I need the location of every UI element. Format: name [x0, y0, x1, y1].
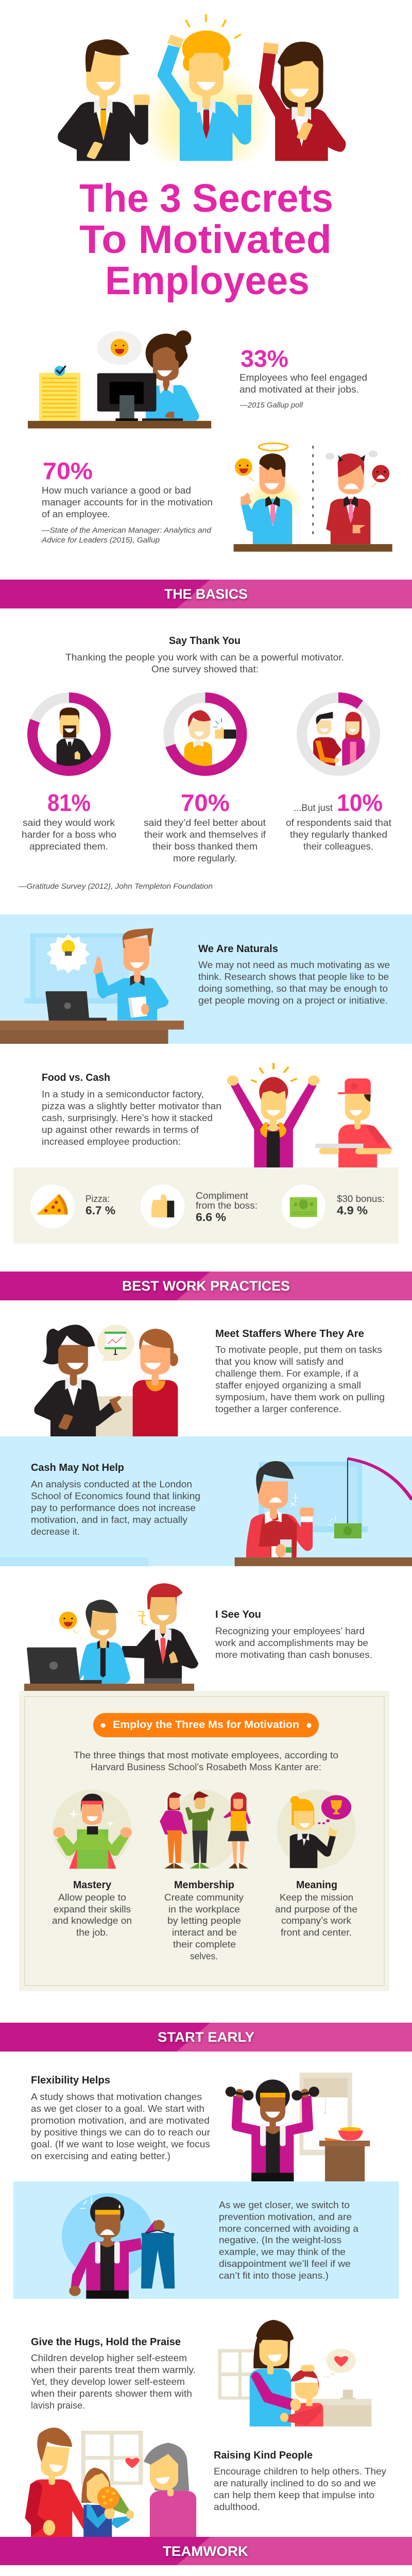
text: bonus: 4.9 % — [337, 1204, 368, 1217]
intro text: The three things that most motivate employees, according to — [74, 1750, 338, 1760]
text: flexibility helps: as we get closer to a goal. We start with — [31, 2104, 204, 2114]
text: say thank you — [65, 635, 344, 674]
section banner: teamwork: TEAMWORK — [163, 2544, 249, 2559]
section banner: best work practices — [0, 1272, 412, 1300]
text: prevention motivation — [219, 2200, 359, 2281]
stat: 33 percent: and motivated at their jobs. — [239, 384, 359, 395]
text: cash may not help: decrease it. — [31, 1527, 80, 1537]
text: meet staffers where they are — [215, 1328, 385, 1414]
text: cash may not help — [31, 1462, 200, 1537]
stat: 70 percent: —State of the American Manager: Analytics and — [41, 527, 212, 535]
illustration: woman exercising with dumbbells — [226, 2073, 370, 2181]
text: flexibility helps — [31, 2075, 210, 2161]
panel: employ the three Ms — [19, 1691, 389, 1991]
text: compliment: 6.6 % — [196, 1211, 226, 1224]
text: survey results: harder for a boss who — [22, 829, 116, 840]
section banner: start early — [0, 2023, 412, 2052]
text: cash may not help: motivation, and in fact, may actually — [31, 1515, 187, 1525]
illustration: mastery — [53, 1790, 132, 1869]
text: i see you: Recognizing your employees’ hard — [215, 1626, 365, 1636]
stat: 70 percent: How much variance a good or bad — [42, 485, 191, 496]
text: pizza — [85, 1194, 115, 1217]
text: prevention motivation: As we get closer, we switch to — [219, 2200, 350, 2210]
icon: cash — [281, 1184, 325, 1228]
text: three Ms columns — [52, 1879, 357, 1961]
text: meet staffers where they are: that you know will satisfy and — [215, 1357, 344, 1367]
stat: 70 percent: manager accounts for in the motivation — [42, 497, 213, 507]
text: prevention motivation: more concerned with avoiding a — [219, 2224, 359, 2234]
text: survey results: their work and themselves if — [144, 829, 266, 840]
text: survey results: ...But just — [294, 803, 333, 813]
title: Employees — [105, 259, 310, 303]
text: prevention motivation: prevention motivation, and are — [219, 2212, 352, 2222]
text: three Ms columns: Membership — [174, 1879, 234, 1891]
text: food vs cash: increased employee production: — [42, 1137, 181, 1147]
text: flexibility helps: Flexibility Helps — [31, 2075, 110, 2086]
illustration: woman worried about fitting in jeans — [62, 2193, 175, 2299]
stat: 70 percent: of an employee. — [42, 509, 110, 519]
illustration: meaning — [277, 1790, 356, 1869]
text: survey results: said they’d feel better about — [144, 818, 266, 828]
text: i see you — [215, 1609, 372, 1660]
text: raising kind people: are naturally inclined to do so and we — [214, 2478, 376, 2488]
text: meet staffers where they are: challenge them. For example, if a — [215, 1368, 359, 1379]
stat: 33 percent: Employees who feel engaged — [239, 372, 367, 383]
illustration: man chasing dangling cash — [0, 1458, 412, 1566]
text: raising kind people: adulthood. — [214, 2502, 260, 2512]
text: pizza: 6.7 % — [85, 1204, 115, 1217]
illustration: boss recognizing employee at laptop — [24, 1583, 198, 1691]
donut chart: 70 percent — [169, 698, 242, 771]
text: compliment — [196, 1191, 258, 1224]
donut chart: 10 percent — [302, 698, 375, 771]
text: three Ms columns: by letting people — [167, 1916, 241, 1926]
illustration: good manager versus bad manager — [234, 443, 392, 552]
text: give the hugs: when their parents treat them warmly. — [30, 2365, 196, 2375]
illustration: mother hugging child — [218, 2320, 371, 2427]
text: survey results: —Gratitude Survey (2012), John Templeton Foundation — [18, 883, 213, 891]
text: survey results: of respondents said that — [286, 818, 391, 828]
section banner: best work practices: BEST WORK PRACTICES — [122, 1278, 290, 1294]
text: survey results: appreciated them. — [29, 841, 108, 852]
text: meet staffers where they are: together a larger conference. — [215, 1404, 341, 1414]
text: i see you: work and accomplishments may be — [215, 1638, 368, 1648]
text: food vs cash: up against other rewards in terms of — [42, 1125, 199, 1135]
text: cash may not help: School of Economics found that linking — [31, 1491, 200, 1501]
text: say thank you: Say Thank You — [169, 635, 241, 647]
text: say thank you: Thanking the people you work with can be a powerful motivator. — [65, 652, 344, 663]
text: give the hugs: when their parents shower them with — [30, 2388, 192, 2399]
text: i see you: I See You — [215, 1609, 261, 1620]
text: food vs cash — [42, 1072, 221, 1147]
text: flexibility helps: goal. (If we want to lose weight, we focus — [31, 2139, 210, 2149]
text: three Ms columns: Meaning — [296, 1879, 337, 1891]
title: To Motivated — [79, 217, 332, 262]
text: survey results: they regularly thanked — [290, 829, 387, 840]
illustration: man with light bulb idea at desk — [0, 928, 184, 1044]
text: three Ms columns: front and center. — [281, 1927, 352, 1938]
text: give the hugs: Give the Hugs, Hold the Praise — [31, 2336, 181, 2348]
text: survey results: 81% — [47, 789, 91, 816]
text: three Ms columns: in the workplace — [168, 1904, 240, 1914]
hero illustration: three cheering employees — [58, 14, 346, 161]
section banner: start early: START EARLY — [158, 2029, 254, 2045]
text: survey results: said they would work — [23, 818, 115, 828]
text: flexibility helps: on exercising and eating better.) — [31, 2151, 170, 2161]
illustration: family with flowers — [25, 2428, 196, 2537]
text: bonus: $30 bonus: — [337, 1194, 385, 1204]
section banner: the basics: THE BASICS — [164, 586, 248, 602]
stat: 33 percent: —2015 Gallup poll — [239, 401, 303, 410]
text: flexibility helps: promotion motivation, and are motivated — [31, 2115, 210, 2126]
text: three Ms columns: and knowledge on — [52, 1916, 132, 1926]
text: cash may not help: Cash May Not Help — [31, 1462, 124, 1473]
pill heading — [93, 1713, 319, 1737]
text: i see you: more motivating than cash bonuses. — [215, 1650, 372, 1660]
text: three Ms columns: Mastery — [73, 1879, 112, 1891]
text: meet staffers where they are: To motivate people, put them on tasks — [215, 1345, 382, 1355]
text: food vs cash: cash, surprisingly. Here’s how it stacked — [42, 1113, 213, 1123]
stat: 70 percent: 70% — [43, 457, 93, 484]
text: three Ms columns: Allow people to — [58, 1892, 126, 1903]
text: we are naturals: get people moving on a project or initiative. — [198, 995, 388, 1006]
text: meet staffers where they are: staffer enjoyed organizing a small — [215, 1380, 361, 1391]
text: give the hugs: Yet, they develop lower self-esteem — [31, 2377, 185, 2387]
text: prevention motivation: disappointment we’ll feel if we — [219, 2259, 351, 2269]
text: food vs cash: In a study in a semiconductor factory, — [42, 1089, 204, 1099]
text: say thank you: One survey showed that: — [151, 664, 259, 674]
illustration: employee cheering for pizza delivery — [227, 1063, 391, 1167]
text: we are naturals: We may not need as much motivating as we — [198, 960, 390, 970]
illustration: membership — [160, 1790, 251, 1869]
text: three Ms columns: interact and be — [172, 1927, 237, 1938]
text: we are naturals: think. Research shows that people like to be — [198, 972, 389, 982]
text: three Ms columns: company’s work — [281, 1916, 352, 1926]
text: survey results: 70% — [181, 789, 230, 816]
text: three Ms columns: selves. — [190, 1951, 218, 1961]
text: three Ms columns: Keep the mission — [280, 1892, 353, 1903]
text: three Ms columns: the job. — [76, 1927, 108, 1938]
text: give the hugs — [30, 2336, 196, 2411]
text: raising kind people: can help them keep that impulse into — [214, 2490, 374, 2500]
intro text: Harvard Business School’s Rosabeth Moss Kanter are: — [91, 1762, 321, 1772]
text: pizza: Pizza: — [85, 1194, 110, 1204]
panel: prevention motivation — [13, 2181, 399, 2299]
text: bonus — [337, 1194, 385, 1217]
text: meet staffers where they are: symposium, have them work on pulling — [215, 1392, 385, 1402]
stat: 33 percent: 33% — [241, 345, 288, 372]
text: food vs cash: pizza was a slightly better motivator than — [42, 1101, 221, 1111]
intro text — [74, 1750, 338, 1772]
text: compliment: from the boss: — [196, 1200, 258, 1211]
text: compliment: Compliment — [196, 1191, 248, 1201]
text: food vs cash: Food vs. Cash — [42, 1072, 110, 1083]
panel: cash may not help — [0, 1436, 412, 1566]
stat: 70 percent: Advice for Leaders (2015), Gallup — [41, 536, 160, 545]
title — [79, 176, 333, 303]
text: three Ms columns: their complete — [173, 1939, 236, 1950]
text: survey results — [18, 789, 391, 891]
text: flexibility helps: by positive things we can do to reach our — [31, 2127, 210, 2138]
text: cash may not help: An analysis conducted at the London — [31, 1479, 192, 1489]
text: raising kind people: Encourage children to help others. They — [214, 2466, 386, 2477]
stat: 70 percent — [41, 457, 213, 545]
text: flexibility helps: A study shows that motivation changes — [31, 2092, 202, 2102]
pill heading: Employ the Three Ms for Motivation — [113, 1719, 299, 1731]
text: we are naturals: We Are Naturals — [198, 943, 278, 955]
stat: 33 percent — [239, 345, 367, 410]
text: we are naturals: doing something, so that may be enough to — [198, 984, 388, 994]
panel: reward comparison — [13, 1167, 399, 1244]
donut chart: 81 percent — [32, 698, 106, 771]
panel: we are naturals — [0, 914, 412, 1044]
text: raising kind people: Raising Kind People — [214, 2450, 313, 2461]
text: give the hugs: Children develop higher self-esteem — [31, 2353, 187, 2363]
text: give the hugs: lavish praise. — [31, 2400, 85, 2411]
text: prevention motivation: example, we may think of the — [219, 2247, 346, 2257]
text: prevention motivation: negative. (In the weight-loss — [219, 2235, 341, 2245]
text: meet staffers where they are: Meet Staffers Where They Are — [215, 1328, 364, 1340]
icon: pizza — [30, 1184, 75, 1228]
section banner: the basics — [0, 580, 412, 608]
text: survey results: their colleagues. — [303, 841, 373, 852]
icon: thumbs up — [141, 1184, 185, 1228]
text: raising kind people — [214, 2450, 386, 2512]
illustration: two coworkers discussing a chart — [34, 1325, 178, 1436]
text: we are naturals — [198, 943, 390, 1006]
text: three Ms columns: expand their skills — [54, 1904, 131, 1914]
text: three Ms columns: and purpose of the — [275, 1904, 357, 1914]
text: cash may not help: pay to performance does not increase — [31, 1503, 196, 1513]
illustration: happy employee at desk — [28, 330, 211, 429]
text: three Ms columns: Create community — [164, 1892, 244, 1903]
text: survey results: their boss thanked them — [152, 841, 258, 852]
section banner: teamwork — [0, 2537, 412, 2565]
text: prevention motivation: can’t fit into those jeans.) — [219, 2270, 329, 2281]
title: The 3 Secrets — [79, 176, 333, 221]
text: survey results: 10% — [337, 789, 383, 816]
text: survey results: more regularly. — [173, 853, 237, 863]
